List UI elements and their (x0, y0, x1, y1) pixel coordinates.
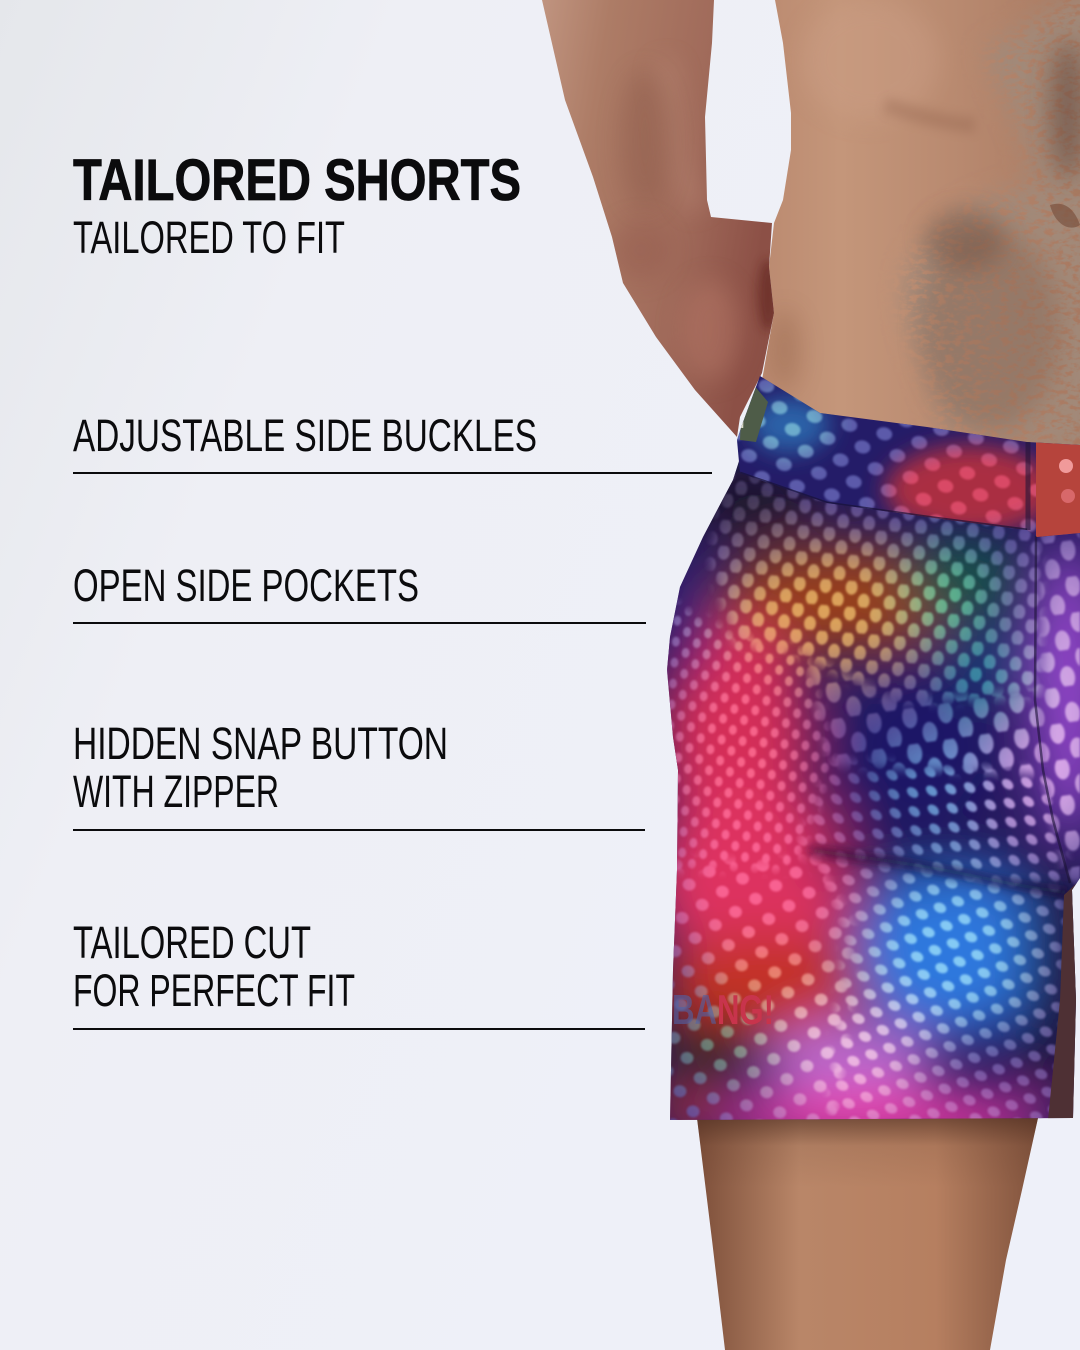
feature: hidden snap button with zipper (73, 718, 645, 831)
leg (697, 1118, 1038, 1350)
feature: tailored cut for perfect fit: FOR PERFECT FIT (73, 965, 355, 1016)
photo: model wearing shorts (530, 0, 1080, 1350)
title: TAILORED SHORTS (73, 148, 521, 213)
shorts dots (660, 450, 1080, 1141)
waistband (730, 370, 1080, 545)
back leg panel (1048, 883, 1077, 1118)
feature: tailored cut for perfect fit (73, 917, 645, 1030)
feature: adjustable side buckles: ADJUSTABLE SIDE BUCKLES (73, 410, 537, 461)
fly edge and crease (1035, 535, 1070, 883)
feature: tailored cut for perfect fit: TAILORED CUT (73, 917, 311, 968)
subtitle: TAILORED TO FIT (73, 212, 345, 263)
front waistband flap (1036, 440, 1080, 537)
shorts logo: BANG! (672, 986, 774, 1033)
side buckle (740, 387, 768, 442)
feature: hidden snap button with zipper: WITH ZIPPER (73, 766, 279, 817)
feature: hidden snap button with zipper: HIDDEN SNAP BUTTON (73, 718, 448, 769)
shorts (650, 450, 1080, 1150)
torso (760, 0, 1080, 480)
body hair (904, 0, 1080, 460)
shorts base colours (650, 470, 1080, 1150)
arm and hand (530, 0, 780, 450)
feature: open side pockets: OPEN SIDE POCKETS (73, 560, 419, 611)
